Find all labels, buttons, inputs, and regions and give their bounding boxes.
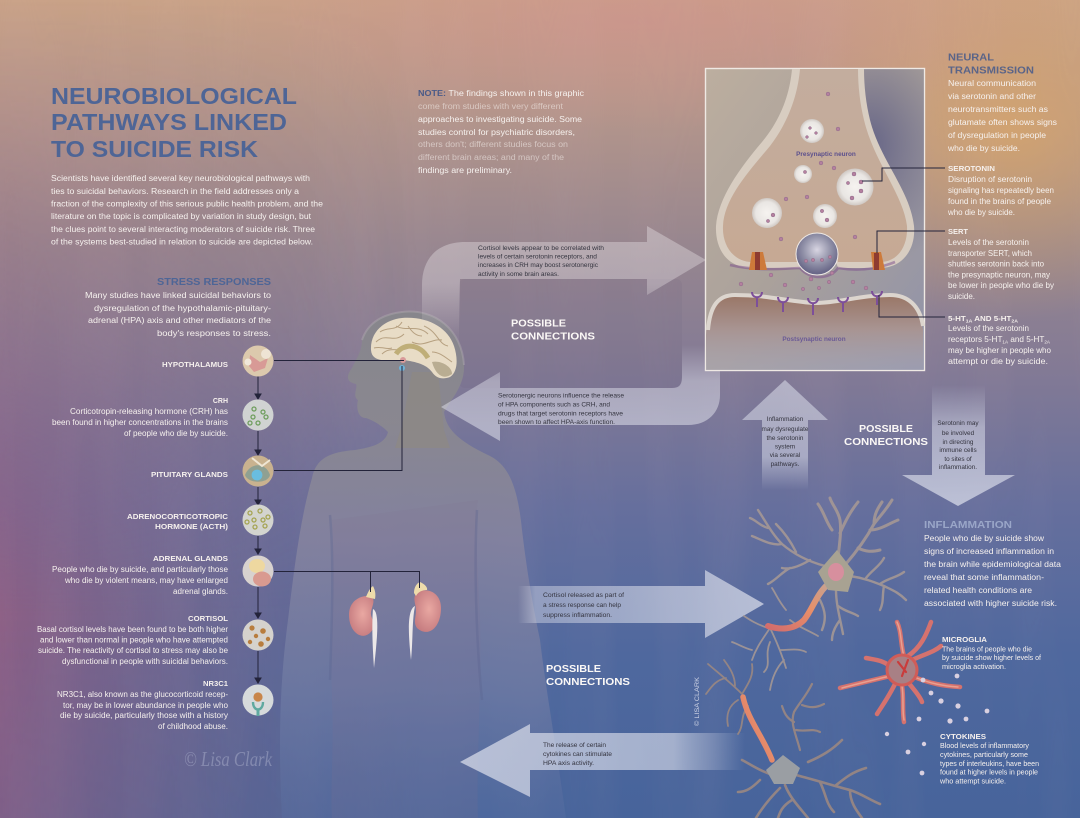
microglia text: microglia activation. xyxy=(942,664,1006,671)
neural transmission text: neurotransmitters such as xyxy=(948,105,1048,114)
5-HT receptors text: Levels of the serotonin xyxy=(948,324,1029,333)
title xyxy=(51,83,297,162)
5-HT receptors text: receptors 5-HT xyxy=(948,335,1001,344)
serotonergic arrow text: drugs that target serotonin receptors have xyxy=(498,410,623,418)
ACTH label: HORMONE (ACTH) xyxy=(155,524,228,531)
5-HT receptors text xyxy=(948,316,1052,366)
cytokines text xyxy=(939,734,1039,786)
up arrow text: Inflammation xyxy=(767,416,804,423)
down arrow text: Serotonin may xyxy=(937,420,979,427)
adrenal text: People who die by suicide, and particularly those xyxy=(52,565,229,574)
cortisol arrow text xyxy=(478,245,604,278)
cytokines text: types of interleukins, have been xyxy=(940,761,1039,768)
icon: pituitary xyxy=(242,456,274,486)
cytokines arrow text: The release of certain xyxy=(543,742,606,749)
down arrow text: immune cells xyxy=(939,447,977,454)
cortisol arrow text: activity in some brain areas. xyxy=(478,271,559,278)
postsynaptic label: Postsynaptic neuron xyxy=(782,336,846,343)
cortisol released text xyxy=(543,592,624,619)
brain xyxy=(371,318,457,378)
note: different brain areas; and many of the xyxy=(418,153,565,162)
cortisol text xyxy=(37,616,229,666)
intro text xyxy=(51,174,324,246)
postsynaptic neuron xyxy=(706,291,923,370)
stress responses text: dysregulation of the hypothalamic-pituitary- xyxy=(94,304,271,313)
cortisol arrow text: increases in CRH may boost serotonergic xyxy=(478,262,599,269)
cortisol text: Basal cortisol levels have been found to be both higher xyxy=(37,625,228,634)
icon: CRH xyxy=(242,400,274,430)
5-HT receptors text: AND 5-HT xyxy=(972,316,1012,323)
serotonergic arrow text xyxy=(498,392,624,426)
note: approaches to investigating suicide. Some xyxy=(418,115,583,124)
stress responses text xyxy=(85,291,272,338)
serotonergic arrow text: Serotonergic neurons influence the release xyxy=(498,392,624,400)
serotonin text xyxy=(947,166,1054,217)
hypothalamus label: HYPOTHALAMUS xyxy=(162,362,228,369)
serotonin dots xyxy=(739,92,868,291)
possible connections lower: CONNECTIONS xyxy=(546,677,630,688)
serotonergic arrow text: been shown to affect HPA-axis function. xyxy=(498,419,615,426)
neural transmission text xyxy=(947,52,1057,153)
neural transmission text: who die by suicide. xyxy=(947,144,1020,153)
heading: neural transmission: NEURAL xyxy=(948,52,994,64)
icon: NR3C1 xyxy=(242,684,274,716)
adrenal text: ADRENAL GLANDS xyxy=(153,556,228,563)
CRH text: of people who die by suicide. xyxy=(124,429,228,438)
connector lines xyxy=(274,168,945,592)
5-HT receptors text: 1A xyxy=(966,318,973,324)
cytokines text: who attempt suicide. xyxy=(939,778,1006,786)
possible connections lower: POSSIBLE xyxy=(546,664,601,675)
heading: stress responses: STRESS RESPONSES xyxy=(157,277,271,288)
adrenal text xyxy=(52,556,229,596)
presynaptic neuron xyxy=(716,69,914,291)
serotonin text: SEROTONIN xyxy=(948,166,995,173)
neural transmission text: glutamate often shows signs xyxy=(948,118,1057,127)
kidneys xyxy=(349,582,441,668)
5-HT receptors text: attempt or die by suicide. xyxy=(948,357,1048,366)
cortisol released text: a stress response can help xyxy=(543,602,621,609)
icon: adrenal xyxy=(242,556,274,586)
cytokines text: Blood levels of inflammatory xyxy=(940,743,1029,750)
NR3C1 text: die by suicide, particularly those with a history xyxy=(60,711,228,720)
credit: © LISA CLARK xyxy=(693,676,701,726)
title: TO SUICIDE RISK xyxy=(51,136,258,162)
CRH text: Corticotropin-releasing hormone (CRH) has xyxy=(70,407,228,416)
cytokines text: cytokines, particularly some xyxy=(940,752,1028,759)
icon: hypothalamus xyxy=(242,346,274,376)
signature: © Lisa Clark xyxy=(184,747,273,771)
icon: ACTH xyxy=(242,504,274,536)
adrenal text: adrenal glands. xyxy=(173,587,228,596)
cortisol arrow text: levels of certain serotonin receptors, and xyxy=(478,254,597,260)
possible connections middle: POSSIBLE xyxy=(859,424,913,435)
neural transmission text: via serotonin and other xyxy=(948,92,1036,101)
pathway arrows xyxy=(255,376,261,683)
HPA axis labels xyxy=(37,362,229,731)
ACTH label xyxy=(127,514,228,531)
SERT text: be lower in people who die by xyxy=(948,281,1054,290)
inflammation text xyxy=(924,520,1062,608)
arrow: serotonin to inflammation xyxy=(902,385,1015,506)
cortisol released text: suppress inflammation. xyxy=(543,612,612,619)
up arrow text: pathways. xyxy=(771,461,800,468)
cortisol text: suicide. The reactivity of cortisol to stress may also be xyxy=(38,646,229,655)
serotonin text: who die by suicide. xyxy=(947,208,1015,217)
pituitary label: PITUITARY GLANDS xyxy=(151,472,228,479)
microglia text xyxy=(942,637,1041,671)
up arrow text: may dysregulate xyxy=(762,426,809,433)
note: come from studies with very different xyxy=(418,102,564,111)
possible connections upper xyxy=(511,318,595,342)
neuron lower xyxy=(706,660,880,818)
heading: neural transmission: TRANSMISSION xyxy=(948,66,1034,76)
intro text: literature on the topic is complicated by variation in study design, but xyxy=(51,212,312,221)
body figure xyxy=(280,312,566,818)
title: NEUROBIOLOGICAL xyxy=(51,83,297,109)
CRH text: CRH xyxy=(213,398,228,405)
ACTH label: ADRENOCORTICOTROPIC xyxy=(127,514,228,521)
title: PATHWAYS LINKED xyxy=(51,109,287,135)
stress responses text: adrenal (HPA) axis and other mediators of the xyxy=(88,316,272,325)
panel: synapse xyxy=(706,68,924,370)
SERT text: SERT xyxy=(948,229,969,236)
cortisol text: CORTISOL xyxy=(188,616,229,623)
stress responses text: body's responses to stress. xyxy=(157,329,271,338)
5-HT receptors text: 5-HT xyxy=(948,316,964,323)
cytokines arrow text: HPA axis activity. xyxy=(543,760,594,767)
5-HT receptors text: 1A xyxy=(1002,340,1008,344)
possible connections lower xyxy=(546,664,630,688)
neural transmission text: of dysregulation in people xyxy=(948,131,1047,140)
NR3C1 text: NR3C1 xyxy=(203,681,228,688)
heading: inflammation: INFLAMMATION xyxy=(924,520,1012,531)
cytokines arrow text xyxy=(543,742,612,767)
microglia text: The brains of people who die xyxy=(942,646,1032,654)
heading: neural transmission xyxy=(948,52,1034,76)
microglia text: by suicide show higher levels of xyxy=(942,655,1041,662)
cortisol arrow text: Cortisol levels appear to be correlated with xyxy=(478,245,604,252)
cytokines text: CYTOKINES xyxy=(940,734,986,741)
serotonergic arrow text: of HPA components such as CRH, and xyxy=(498,402,610,408)
intro text: Scientists have identified several key neurobiological pathways with xyxy=(51,174,310,183)
receptors xyxy=(752,291,882,315)
intro text: ties to suicidal behaviors. Research in the field addresses only a xyxy=(51,187,300,196)
5-HT receptors text: 2A xyxy=(1011,318,1019,324)
neural transmission text: Neural communication xyxy=(948,79,1036,88)
inflammation text: associated with higher suicide risk. xyxy=(924,599,1057,608)
intro text: of the systems best-studied in relation to suicide are depicted below. xyxy=(51,238,313,246)
CRH text xyxy=(52,398,228,438)
down arrow text: inflammation. xyxy=(939,464,977,471)
SERT transporters xyxy=(749,252,885,270)
note xyxy=(418,89,584,175)
inflammation text: the brain while epidemiological data xyxy=(924,560,1062,569)
down arrow text: to sites of xyxy=(944,456,972,463)
up arrow text: system xyxy=(775,444,795,450)
icon: cortisol xyxy=(242,620,274,650)
down arrow text xyxy=(937,420,979,471)
possible connections middle xyxy=(844,424,928,448)
inflammation text: related health conditions are xyxy=(924,586,1033,595)
up arrow text xyxy=(762,416,809,468)
note: studies control for psychiatric disorders, xyxy=(418,128,575,137)
inflammation text: People who die by suicide show xyxy=(924,534,1044,543)
possible connections middle: CONNECTIONS xyxy=(844,437,928,448)
intro text: fraction of the complexity of this serious public health problem, and the xyxy=(51,200,324,208)
presynaptic label: Presynaptic neuron xyxy=(796,151,856,158)
SERT text: suicide. xyxy=(948,292,975,301)
stress responses text: Many studies have linked suicidal behaviors to xyxy=(85,291,272,300)
vesicles xyxy=(752,119,874,275)
note: others don't; different studies focus on xyxy=(418,140,568,149)
possible connections upper: CONNECTIONS xyxy=(511,332,595,342)
NR3C1 text: of childhood abuse. xyxy=(158,722,228,731)
arrow: cortisol to inflammation xyxy=(518,570,764,638)
NR3C1 text xyxy=(57,681,229,731)
cytokine dots xyxy=(885,674,989,775)
serotonin text: signaling has repeatedly been xyxy=(948,186,1054,195)
cortisol text: dysfunctional in people with suicidal behaviors. xyxy=(62,657,228,666)
down arrow text: be involved xyxy=(942,430,975,437)
microglia text: MICROGLIA xyxy=(942,637,987,644)
cortisol text: and lower than normal in people who have attempted xyxy=(40,636,228,644)
SERT text: the presynaptic neuron, may xyxy=(948,270,1050,280)
cortisol released text: Cortisol released as part of xyxy=(543,592,624,599)
up arrow text: via several xyxy=(770,452,800,459)
note: findings are preliminary. xyxy=(418,166,512,175)
5-HT receptors text: and 5-HT xyxy=(1008,335,1044,344)
neuron upper xyxy=(732,498,906,690)
SERT text: transporter SERT, which xyxy=(948,249,1032,258)
up arrow text: the serotonin xyxy=(767,435,804,442)
arrow: serotonin to HPA axis xyxy=(441,345,720,441)
note: NOTE: The findings shown in this graphic xyxy=(418,89,584,98)
arrow: inflammation to serotonin xyxy=(742,380,828,490)
microglia xyxy=(840,622,960,722)
adrenal text: who die by violent means, may have enlarged xyxy=(64,576,228,585)
SERT text: shuttles serotonin back into xyxy=(948,260,1045,268)
CRH text: been found in higher concentrations in the brains xyxy=(52,418,228,427)
intro text: the clues point to several interacting moderators of suicide risk. Three xyxy=(51,225,316,234)
5-HT receptors text: may be higher in people who xyxy=(948,346,1052,355)
cytokines arrow text: cytokines can stimulate xyxy=(543,751,612,758)
cytokines text: found at higher levels in people xyxy=(940,770,1038,776)
SERT text: Levels of the serotonin xyxy=(948,238,1029,247)
possible connections upper: POSSIBLE xyxy=(511,318,566,330)
NR3C1 text: tor, may be in lower abundance in people who xyxy=(63,701,229,710)
serotonin text: Disruption of serotonin xyxy=(948,175,1032,184)
5-HT receptors text: 2A xyxy=(1044,340,1050,344)
serotonin text: found in the brains of people xyxy=(948,197,1052,206)
arrow: cytokines to HPA axis xyxy=(460,724,745,797)
SERT text xyxy=(948,229,1054,301)
NR3C1 text: NR3C1, also known as the glucocorticoid recep- xyxy=(57,690,228,699)
arrow: cortisol to serotonin xyxy=(422,226,706,335)
inflammation text: reveal that some inflammation- xyxy=(924,573,1044,582)
inflammation text: signs of increased inflammation in xyxy=(924,547,1054,556)
down arrow text: in directing xyxy=(943,439,974,446)
